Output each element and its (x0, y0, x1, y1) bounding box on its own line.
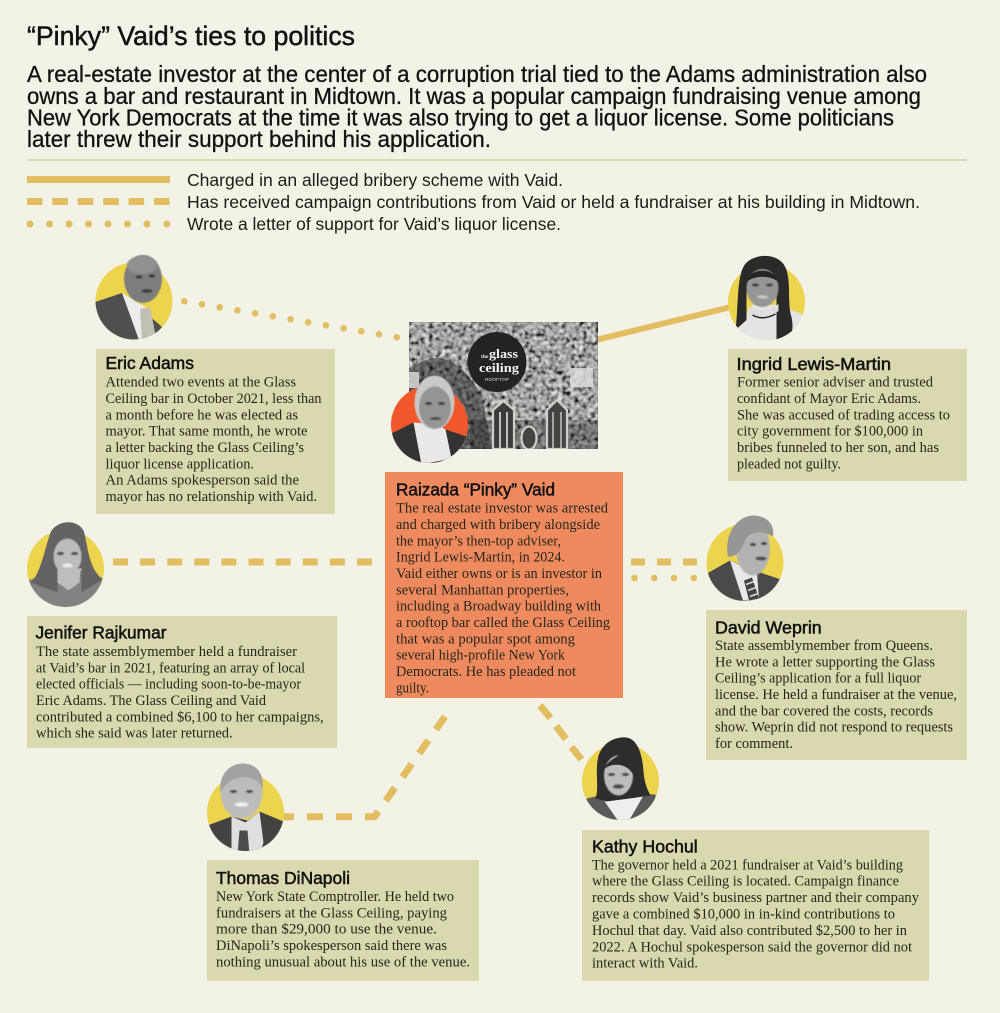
connector: Adams dotted (181, 298, 400, 341)
body: Raizada Pinky Vaid: the mayor’s then-top adviser, (396, 533, 561, 549)
body: Raizada Pinky Vaid: Democrats. He has pleaded not (396, 664, 576, 680)
body: Raizada Pinky Vaid: Vaid either owns or is an investor in (396, 566, 603, 582)
legend: dotted line, letter of support: Wrote a letter of support for Vaid’s liquor license. (187, 214, 561, 234)
body: Eric Adams: An Adams spokesperson said the (106, 473, 299, 489)
portrait: Thomas DiNapoli (207, 764, 284, 858)
body: David Weprin: license. He held a fundraiser at the venue, (715, 687, 957, 703)
body: Ingrid Lewis-Martin: confidant of Mayor Eric Adams. (737, 391, 921, 407)
body: Eric Adams: a letter backing the Glass Ceiling’s (106, 440, 304, 456)
intro text: owns a bar and restaurant in Midtown. It was a popular campaign fundraising venue among (27, 83, 921, 109)
card: Thomas DiNapoli (207, 860, 479, 981)
intro text: A real-estate investor at the center of a corruption trial tied to the Adams administration also (27, 61, 927, 87)
body: Jenifer Rajkumar: The state assemblymember held a fundraiser (36, 644, 297, 660)
body: David Weprin: and the bar covered the costs, records (715, 703, 933, 719)
body: David Weprin: Ceiling’s application for a full liquor (715, 671, 921, 687)
body: Raizada Pinky Vaid: The real estate investor was arrested (396, 501, 609, 517)
legend: solid line, charged: Charged in an alleged bribery scheme with Vaid. (187, 170, 563, 190)
body: Kathy Hochul: gave a combined $10,000 in in-kind contributions to (592, 906, 895, 922)
legend: dotted line, letter of support (26, 214, 561, 234)
body: Raizada Pinky Vaid (396, 501, 611, 696)
body: Raizada Pinky Vaid: several high-profile New York (396, 648, 566, 664)
body: Ingrid Lewis-Martin: city government for $100,000 in (737, 424, 924, 440)
body: Eric Adams: mayor has no relationship with Vaid. (106, 489, 317, 505)
body: Kathy Hochul: interact with Vaid. (592, 956, 698, 972)
name: Ingrid Lewis-Martin: Ingrid Lewis-Martin (736, 354, 891, 374)
body: Jenifer Rajkumar: which she said was later returned. (36, 726, 233, 742)
body: Eric Adams: Attended two events at the Glass (106, 375, 296, 391)
body: Kathy Hochul: Hochul that day. Vaid also contributed $2,500 to her in (592, 923, 908, 939)
portrait: Kathy Hochul (582, 737, 659, 826)
connector: Hochul dashed (540, 706, 582, 760)
body: Eric Adams: a month before he was elected as (106, 407, 298, 423)
card: Kathy Hochul (582, 830, 929, 981)
legend (26, 170, 920, 234)
body: Raizada Pinky Vaid: Ingrid Lewis-Martin, in 2024. (396, 550, 565, 566)
body: David Weprin: for comment. (715, 736, 793, 752)
body: David Weprin: show. Weprin did not respond to requests (715, 720, 953, 736)
body: Raizada Pinky Vaid: several Manhattan properties, (396, 582, 569, 598)
card: Ingrid Lewis-Martin (728, 349, 967, 481)
connector: Rajkumar dashed (113, 558, 372, 566)
body: Raizada Pinky Vaid: a rooftop bar called the Glass Ceiling (396, 615, 611, 631)
body: Jenifer Rajkumar: at Vaid’s bar in 2021, featuring an array of local (36, 660, 305, 676)
body: Thomas DiNapoli: New York State Comptroller. He held two (216, 889, 454, 905)
intro text: New York Democrats at the time it was also trying to get a liquor license. Some politicians (27, 104, 894, 130)
intro text (27, 61, 927, 152)
name: Raizada Pinky Vaid: Raizada “Pinky” Vaid (396, 479, 555, 499)
name: Eric Adams: Eric Adams (106, 353, 194, 373)
body: Raizada Pinky Vaid: and charged with bribery alongside (396, 517, 600, 533)
body: Ingrid Lewis-Martin: She was accused of trading access to (737, 407, 950, 423)
body: Eric Adams: Ceiling bar in October 2021, less than (106, 391, 322, 407)
sign: the glass ceiling rooftop (468, 332, 526, 392)
body: Raizada Pinky Vaid: that was a popular spot among (396, 631, 576, 647)
body: Ingrid Lewis-Martin: Former senior adviser and trusted (737, 375, 934, 391)
connector: Lewis-Martin solid (598, 306, 735, 340)
card: David Weprin (706, 610, 967, 760)
body: David Weprin (715, 638, 957, 752)
body: Jenifer Rajkumar: Eric Adams. The Glass Ceiling and Vaid (36, 693, 267, 709)
body: Kathy Hochul (592, 857, 920, 972)
body: Jenifer Rajkumar: elected officials — including soon-to-be-mayor (36, 677, 301, 693)
card: Raizada Pinky Vaid (385, 472, 623, 698)
legend: solid line, charged (27, 170, 563, 190)
card: Eric Adams (96, 349, 335, 514)
body: Eric Adams (106, 375, 322, 505)
name: Thomas DiNapoli: Thomas DiNapoli (216, 868, 350, 888)
body: Kathy Hochul: The governor held a 2021 fundraiser at Vaid’s building (592, 857, 904, 873)
name: David Weprin: David Weprin (715, 617, 822, 637)
body: Ingrid Lewis-Martin: pleaded not guilty. (737, 456, 841, 472)
body: Thomas DiNapoli: nothing unusual about his use of the venue. (216, 954, 470, 970)
portrait: David Weprin (706, 516, 784, 608)
legend: dashed line, contributions: Has received campaign contributions from Vaid or held a fundraiser at his building in Midtown. (187, 192, 920, 212)
sign: the glass ceiling rooftop: the (481, 354, 489, 360)
photo: Glass Ceiling rooftop bar (409, 322, 600, 450)
lanterns and mirror (493, 400, 567, 450)
body: Thomas DiNapoli: more than $29,000 to use the venue. (216, 922, 437, 938)
body: Thomas DiNapoli (216, 889, 470, 970)
body: Jenifer Rajkumar (36, 644, 324, 742)
portrait: Jenifer Rajkumar (27, 522, 104, 614)
body: Kathy Hochul: 2022. A Hochul spokesperson said the governor did not (592, 939, 912, 955)
body: David Weprin: He wrote a letter supporting the Glass (715, 654, 935, 670)
body: Kathy Hochul: records show Vaid’s business partner and their company (592, 890, 920, 906)
sign: the glass ceiling rooftop: ROOFTOP (485, 377, 509, 382)
body: Eric Adams: mayor. That same month, he wrote (106, 424, 308, 440)
body: Ingrid Lewis-Martin (737, 375, 950, 472)
body: Thomas DiNapoli: DiNapoli’s spokesperson said there was (216, 938, 447, 954)
intro text: later threw their support behind his application. (27, 126, 491, 152)
body: Raizada Pinky Vaid: guilty. (396, 680, 429, 696)
body: Thomas DiNapoli: fundraisers at the Glass Ceiling, paying (216, 905, 448, 921)
connector: DiNapoli dashed (278, 706, 452, 817)
body: Kathy Hochul: where the Glass Ceiling is located. Campaign finance (592, 874, 899, 890)
body: David Weprin: State assemblymember from Queens. (715, 638, 933, 654)
body: Jenifer Rajkumar: contributed a combined $6,100 to her campaigns, (36, 709, 324, 725)
title: “Pinky” Vaid’s ties to politics (27, 21, 355, 51)
connector: Weprin dashed and dotted (631, 562, 697, 581)
body: Eric Adams: liquor license application. (106, 456, 254, 472)
card: Jenifer Rajkumar (27, 616, 337, 748)
portrait: Raizada Pinky Vaid (390, 376, 470, 470)
sign: the glass ceiling rooftop: glass (489, 346, 518, 361)
body: Ingrid Lewis-Martin: bribes funneled to her son, and has (737, 440, 939, 456)
name: Jenifer Rajkumar: Jenifer Rajkumar (36, 623, 167, 643)
portrait: Ingrid Lewis-Martin (728, 256, 806, 347)
portrait: Eric Adams (95, 255, 172, 346)
body: Raizada Pinky Vaid: including a Broadway building with (396, 599, 602, 615)
sign: the glass ceiling rooftop: ceiling (479, 360, 520, 375)
name: Kathy Hochul: Kathy Hochul (592, 836, 698, 856)
